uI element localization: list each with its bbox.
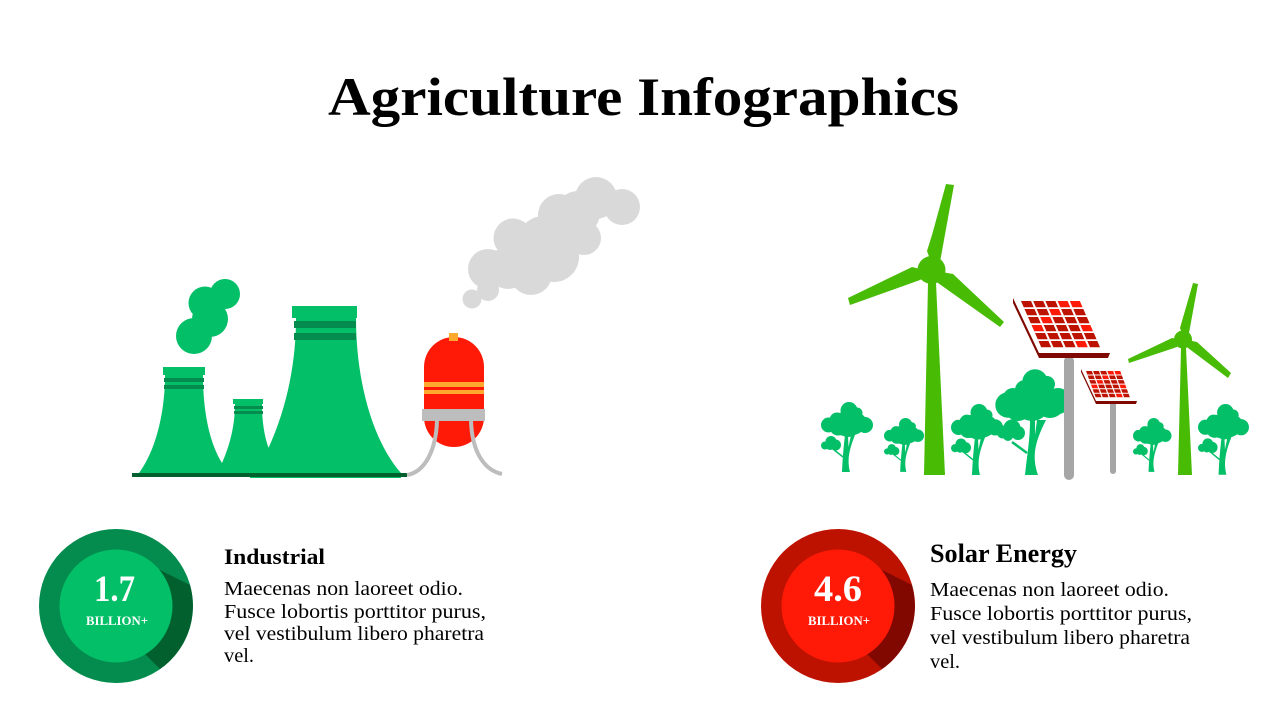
heading: Industrial (224, 544, 325, 569)
body: Fusce lobortis porttitor purus, (224, 601, 486, 623)
cooling tower: middle (212, 399, 280, 473)
tree 5 (1133, 418, 1171, 472)
stat value: 1.7 (94, 569, 135, 610)
red tank (407, 333, 502, 475)
cooling tower: large (246, 306, 401, 478)
tree 1 (821, 402, 873, 472)
ground bar (132, 473, 407, 477)
stat unit: BILLION+ (86, 614, 148, 628)
cooling tower: small left (139, 367, 235, 473)
stat unit: BILLION+ (808, 614, 870, 628)
body (930, 579, 1192, 673)
gray smoke (462, 177, 640, 308)
title: Agriculture Infographics (328, 67, 959, 127)
stat value: 4.6 (814, 569, 862, 610)
body: Fusce lobortis porttitor purus, (930, 603, 1192, 625)
stat circle: industrial (39, 529, 193, 683)
body: vel. (930, 651, 960, 673)
solar panel: small (1081, 369, 1137, 474)
text block: industrial (224, 544, 486, 667)
body: vel vestibulum libero pharetra (930, 627, 1190, 649)
green smoke (176, 279, 240, 354)
body: Maecenas non laoreet odio. (224, 578, 463, 600)
tree 3 (951, 404, 1003, 475)
body: vel vestibulum libero pharetra (224, 623, 484, 645)
body: vel. (224, 645, 254, 667)
tree 6 (1198, 404, 1249, 475)
illustration: renewable energy (821, 184, 1249, 480)
body (224, 578, 486, 667)
tree 2 (884, 418, 924, 472)
text block: solar energy (930, 539, 1192, 673)
wind turbine: small (1128, 283, 1231, 475)
heading: Solar Energy (930, 539, 1077, 568)
solar panel: large (1013, 298, 1110, 480)
stat circle: solar energy (761, 529, 915, 683)
illustration: industrial plant (132, 177, 640, 478)
tree 4: large (995, 369, 1071, 475)
body: Maecenas non laoreet odio. (930, 579, 1169, 601)
wind turbine: large (848, 184, 1004, 475)
